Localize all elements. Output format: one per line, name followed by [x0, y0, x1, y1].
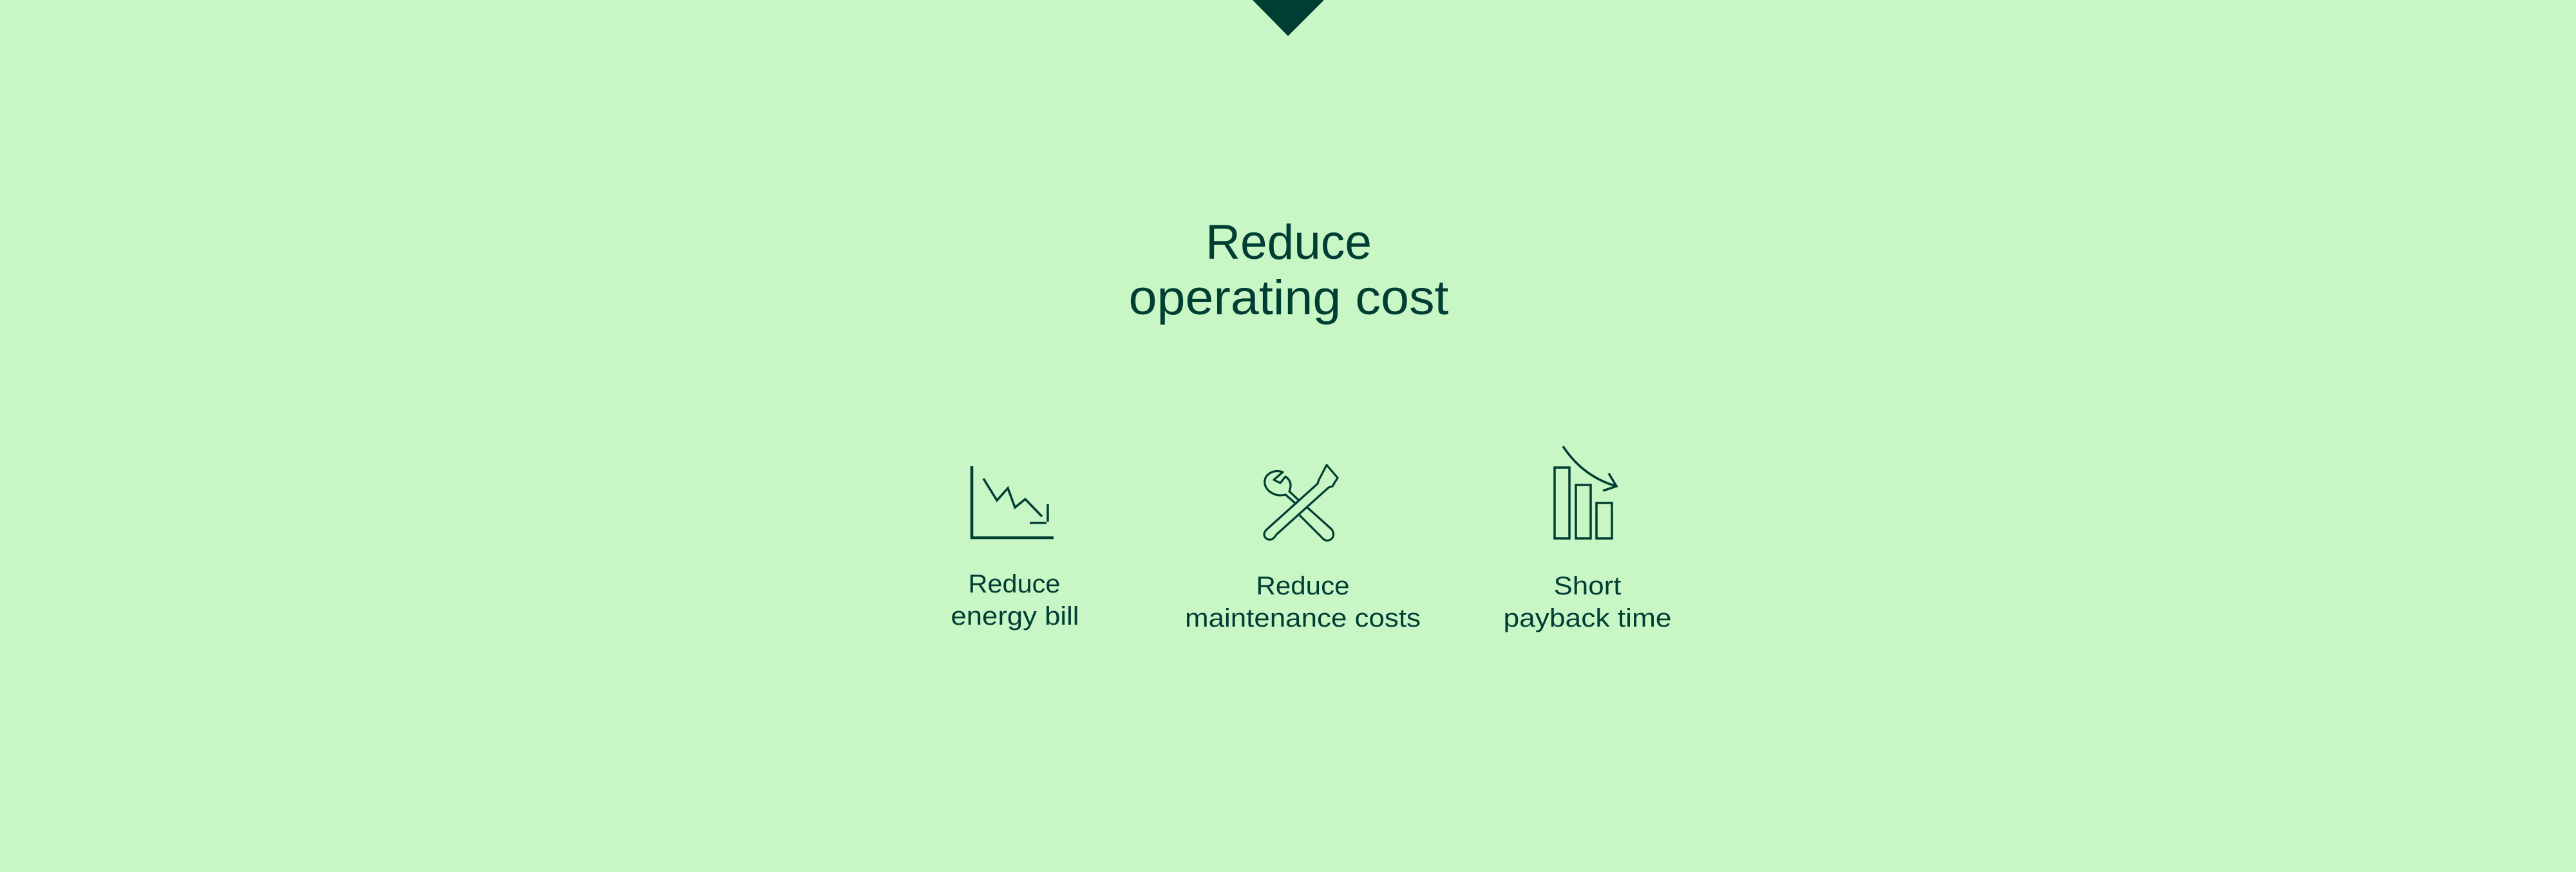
icon: wrench and screwdriver — [1264, 465, 1338, 540]
item: reduce energy bill — [951, 466, 1079, 630]
label: short payback time: Short — [1553, 572, 1622, 600]
item: short payback time — [1503, 446, 1672, 632]
label: reduce maintenance costs: maintenance costs — [1185, 604, 1421, 632]
label: short payback time — [1503, 572, 1672, 632]
label: reduce maintenance costs — [1185, 572, 1421, 632]
icon: falling line chart — [972, 466, 1054, 538]
triangle pointer — [1253, 0, 1324, 36]
item: reduce maintenance costs — [1185, 465, 1421, 632]
title: operating cost — [1128, 270, 1449, 325]
label: reduce energy bill: energy bill — [951, 602, 1079, 630]
label: reduce maintenance costs: Reduce — [1256, 572, 1350, 600]
icon: shrinking bars with arrow — [1555, 446, 1616, 538]
label: reduce energy bill — [951, 570, 1079, 630]
label: short payback time: payback time — [1503, 604, 1672, 632]
label: reduce energy bill: Reduce — [969, 570, 1060, 598]
title — [1128, 215, 1449, 325]
title: Reduce — [1206, 215, 1372, 270]
